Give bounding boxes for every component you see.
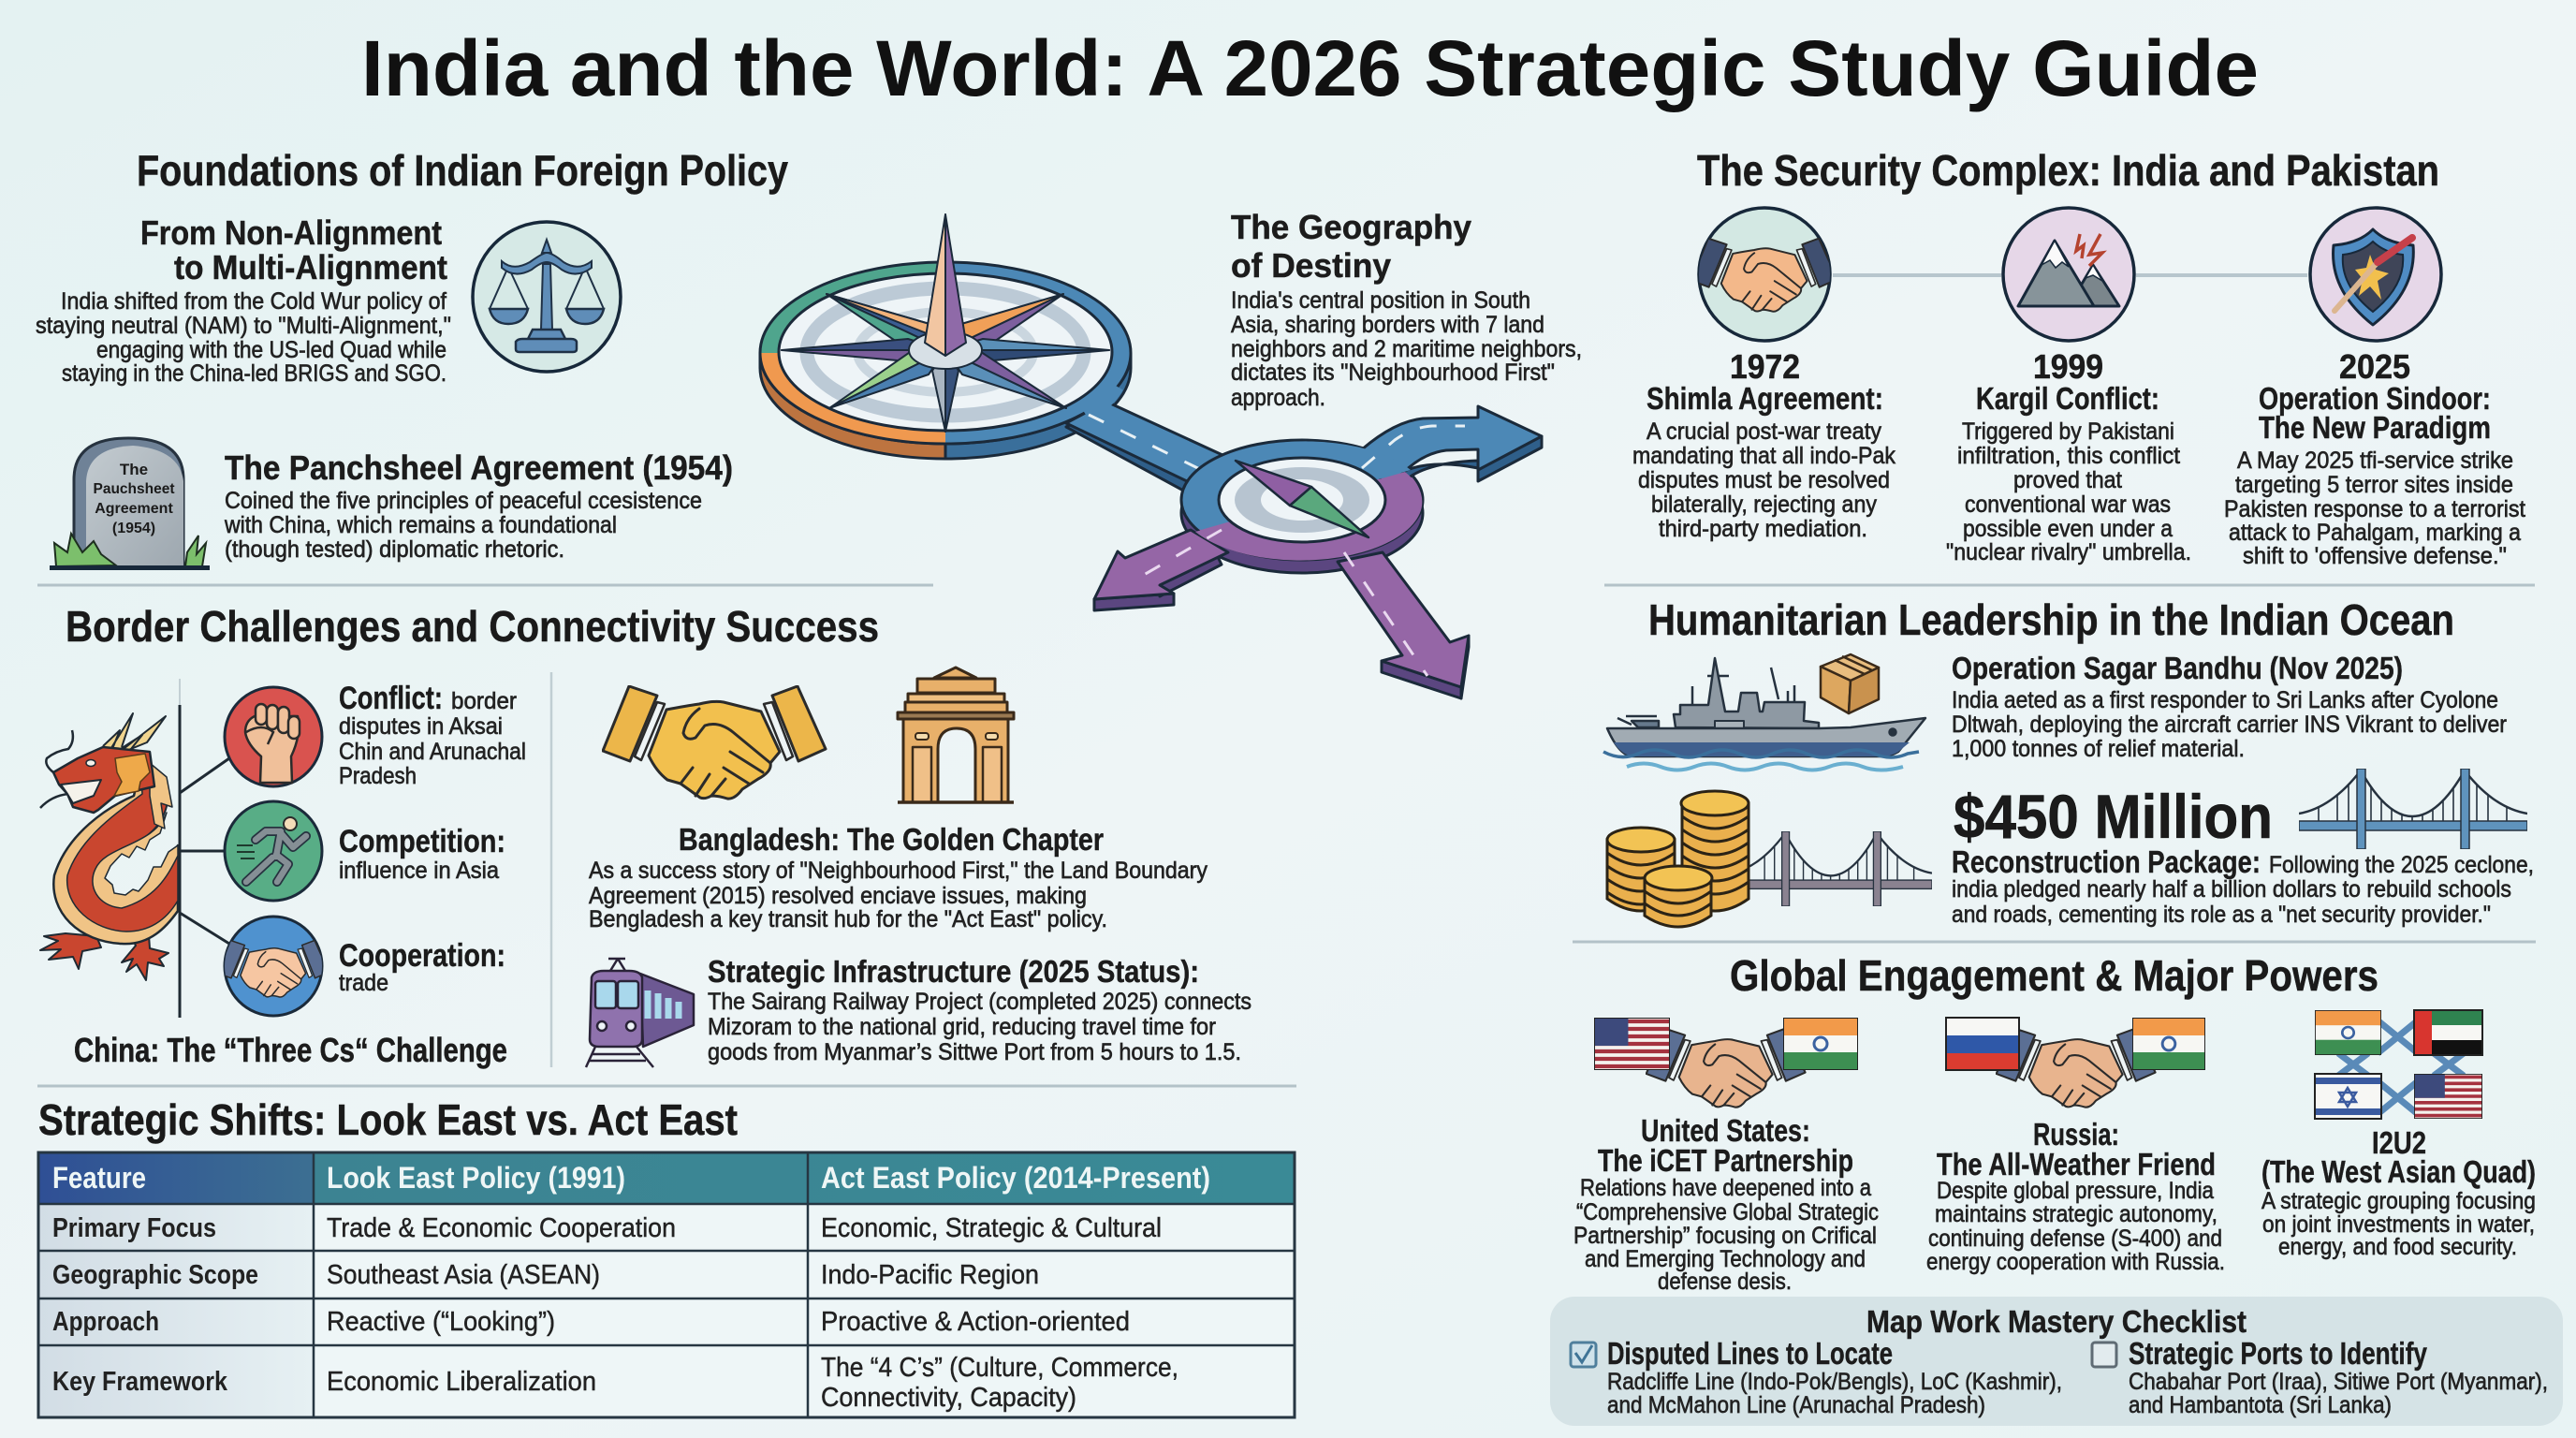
table: look east vs act east: Look East Policy (1991) [327,1161,625,1195]
text: I2U2: on joint investments in water, [2262,1211,2535,1238]
text: competition: influence in Asia [339,858,499,884]
text: cooperation: trade [339,970,388,996]
table: look east vs act east: Approach [52,1307,159,1337]
stat: $450 million: $450 Million [1954,782,2273,851]
panel: map work checklist [1550,1297,2563,1426]
table: look east vs act east: Connectivity, Capacity) [821,1383,1076,1413]
subheading: strategic infrastructure: Strategic Infrastructure (2025 Status): [708,954,1199,989]
icon: train [586,959,694,1067]
text: conflict: border [451,688,517,714]
subheading: non-alignment to multi-alignment: to Multi-Alignment [174,248,447,286]
icon: Shimla handshake [1691,208,1837,341]
timeline: 1999 Kargil: infiltration, this conflict [1957,443,2180,469]
text: infrastructure description: Mizoram to the national grid, reducing travel time for [708,1014,1216,1040]
icon: grey bridge [1731,831,1932,906]
text: competition: Competition: [339,824,505,859]
icon: scales of justice [473,222,621,372]
panel: global engagement [1573,951,2536,1295]
text: reconstruction package [1952,844,2534,928]
text: United States: and Emerging Technology and [1585,1246,1866,1272]
timeline: 2025 Sindoor: Pakisten response to a terrorist [2224,496,2525,522]
text: reconstruction package: Reconstruction Package: [1952,844,2261,879]
text: Russia: continuing defense (S-400) and [1928,1225,2222,1252]
text: geography description [1231,287,1582,411]
table: look east vs act east: Proactive & Action-oriented [821,1307,1130,1337]
illustration: compass and roads (geography of destiny) [760,214,1542,698]
icon: dragon [40,713,178,980]
text: United States: The iCET Partnership [1598,1143,1853,1178]
icon: blue bridge [2299,769,2527,849]
text: multi-alignment description: engaging with the US-led Quad while [96,337,446,363]
text: disputed lines: Disputed Lines to Locate [1607,1336,1893,1371]
text: geography description: neighbors and 2 maritime neighbors, [1231,336,1582,362]
text: reconstruction package: Following the 2025 ceclone, [2269,852,2534,878]
text: I2U2: energy, and food security. [2278,1234,2517,1260]
text: conflict: Pradesh [339,763,417,789]
text: United States: United States: [1641,1113,1810,1148]
subheading: geography: of Destiny [1231,246,1391,285]
text: I2U2 [2261,1125,2536,1260]
text: Russia: The All-Weather Friend [1937,1147,2216,1181]
table: look east vs act east: Indo-Pacific Region [821,1260,1039,1290]
road: compass to hub [1066,386,1222,492]
icon: conflict fist [225,687,322,786]
timeline: 1972 Shimla [1632,347,1895,542]
icon: coin stacks [1607,791,1749,927]
text: geography description: approach. [1231,385,1325,411]
icon: golden handshake [603,686,826,799]
heading: humanitarian: Humanitarian Leadership in the Indian Ocean [1648,595,2454,644]
text: strategic ports: and Hambantota (Sri Lanka) [2129,1392,2392,1418]
timeline: 2025 Sindoor: attack to Pahalgam, marking a [2229,520,2521,546]
timeline: 1972 Shimla: third-party mediation. [1659,516,1867,542]
panel: geography of destiny [1231,208,1582,411]
icon: Sindoor shield [2310,208,2441,341]
timeline: 1972 Shimla: Shimla Agreement: [1647,381,1883,416]
text: Bangladesh description: As a success story of "Neighbourhood First," the Land Boundary [589,858,1208,884]
table: look east vs act east: The “4 C’s” (Culture, Commerce, [821,1353,1178,1383]
table: look east vs act east [38,1152,1295,1417]
icon: US India handshake [1594,1018,1858,1108]
timeline: 2025 Sindoor: shift to 'offensive defense." [2243,543,2507,569]
text: multi-alignment description [36,288,451,387]
text: cooperation: Cooperation: [339,938,505,974]
text: Russia: energy cooperation with Russia. [1926,1249,2225,1275]
road hub with arrows [1094,406,1542,698]
text: conflict: Chin and Arunachal [339,739,526,765]
icon: tombstone with grass [50,438,210,570]
subheading: Panchsheel: The Panchsheel Agreement (1954) [225,448,733,487]
panel: foundations of Indian foreign policy [36,146,788,570]
timeline: 1972 Shimla: 1972 [1730,347,1800,386]
text: Panchsheel description [224,488,702,563]
heading: border challenges: Border Challenges and Connectivity Success [66,602,879,651]
text: Russia: Russia: [2033,1117,2119,1152]
icon: tombstone with grass: Agreement [95,501,173,517]
text: geography description: India's central position in South [1231,287,1530,314]
text: infrastructure description: The Sairang Railway Project (completed 2025) connects [708,989,1251,1015]
icon: I2U2 flags [2315,1010,2482,1119]
timeline: 1999 Kargil [1946,347,2191,565]
compass disk [760,262,1131,459]
text: United States [1573,1113,1879,1295]
text: Sagar Bandhu description: Dltwah, deploying the aircraft carrier INS Vikrant to deliver [1952,712,2507,738]
text: Bangladesh description: Agreement (2015) resolved enciave issues, making [589,883,1087,909]
subheading: geography: The Geography [1231,208,1471,246]
table: look east vs act east: Trade & Economic Cooperation [327,1213,676,1243]
icon: empty box [2092,1343,2116,1367]
arrow: north-east [1362,406,1542,487]
timeline: 2025 Sindoor: 2025 [2339,347,2410,386]
table: look east vs act east: Economic, Strategic & Cultural [821,1213,1162,1243]
text: I2U2: A strategic grouping focusing [2261,1188,2536,1214]
icon: Kargil mountains [2003,208,2134,341]
text: infrastructure description: goods from Myanmar’s Sittwe Port from 5 hours to 1.5. [708,1039,1241,1065]
table: look east vs act east: Primary Focus [52,1213,216,1243]
text: infrastructure description [708,989,1251,1065]
timeline: 2025 Sindoor: The New Paradigm [2259,410,2491,445]
heading: strategic shifts: Strategic Shifts: Look East vs. Act East [38,1095,738,1144]
text: geography description: Asia, sharing borders with 7 land [1231,312,1544,338]
subheading: Sagar Bandhu: Operation Sagar Bandhu (Nov 2025) [1952,651,2403,685]
text: disputed lines: and McMahon Line (Arunachal Pradesh) [1607,1392,1985,1418]
timeline: 1999 Kargil: Kargil Conflict: [1976,381,2159,416]
icon: relief box [1821,654,1879,713]
text: geography description: dictates its "Neighbourhood First" [1231,360,1555,386]
table: look east vs act east: Feature [52,1161,146,1195]
icon: Russia India handshake [1946,1018,2205,1108]
timeline: 1999 Kargil: proved that [2013,467,2122,493]
icon: tombstone with grass: Pauchsheet [93,481,175,497]
text: United States: Relations have deepened into a [1580,1175,1871,1201]
text: conflict: Conflict: [339,681,443,716]
heading: foundations: Foundations of Indian Foreign Policy [137,146,788,195]
text: Russia: Despite global pressure, India [1937,1178,2214,1204]
icon: checked box [1571,1343,1596,1367]
text: Sagar Bandhu description: 1,000 tonnes of relief material. [1952,736,2245,762]
panel: security complex [1632,146,2525,569]
text: Sagar Bandhu description [1952,687,2507,762]
text: disputed lines [1607,1336,2062,1418]
star rose [782,214,1109,432]
timeline: 2025 Sindoor [2224,347,2525,569]
text: competition [339,824,505,884]
text: Panchsheel description: (though tested) diplomatic rhetoric. [225,536,564,563]
timeline: 1972 Shimla: disputes must be resolved [1638,467,1890,493]
timeline: 2025 Sindoor: targeting 5 terror sites inside [2235,472,2513,498]
icon: tombstone with grass: (1954) [112,521,155,536]
heading: security complex: The Security Complex: India and Pakistan [1697,146,2439,195]
table: look east vs act east: Economic Liberalization [327,1367,596,1397]
text: conflict [339,681,526,789]
text: Panchsheel description: Coined the five principles of peaceful ccesistence [225,488,702,514]
connector lines [180,679,229,1018]
table: look east vs act east: Key Framework [52,1367,228,1397]
text: cooperation [339,938,505,996]
timeline: 2025 Sindoor: Operation Sindoor: [2259,381,2491,416]
text: Panchsheel description: with China, which remains a foundational [224,512,617,538]
text: Russia [1926,1117,2225,1275]
timeline: 1999 Kargil: possible even under a [1963,516,2173,542]
icon: competition runner [225,801,322,901]
table: look east vs act east: Reactive (“Looking”) [327,1307,555,1337]
timeline: 1999 Kargil: Triggered by Pakistani [1962,418,2174,445]
arrow: south-west [1094,530,1228,610]
table: look east vs act east: Southeast Asia (ASEAN) [327,1260,600,1290]
subheading: non-alignment to multi-alignment [140,213,447,286]
text: disputed lines: Radcliffe Line (Indo-Pok/Bengls), LoC (Kashmir), [1607,1369,2062,1395]
subheading: Bangladesh: Bangladesh: The Golden Chapter [679,822,1104,857]
text: Russia: maintains strategic autonomy, [1935,1201,2217,1227]
text: United States: defense desis. [1658,1269,1792,1295]
arrow: south-east [1338,552,1469,698]
text: I2U2: I2U2 [2372,1125,2426,1160]
heading: checklist: Map Work Mastery Checklist [1866,1304,2247,1339]
timeline: 1972 Shimla: A crucial post-war treaty [1647,418,1881,445]
text: Bangladesh description: Bengladesh a key transit hub for the "Act East" policy. [589,906,1107,932]
text: United States: “Comprehensive Global Strategic [1576,1199,1879,1225]
timeline: 2025 Sindoor: A May 2025 tfi-service strike [2237,448,2513,474]
title: India and the World: A 2026 Strategic Study Guide [361,24,2259,112]
timeline: 1999 Kargil: 1999 [2033,347,2103,386]
text: Sagar Bandhu description: India aeted as a first responder to Sri Lanks after Cyolone [1952,687,2498,713]
icon: naval ship [1603,658,1925,770]
text: multi-alignment description: staying in the China-led BRIGS and SGO. [62,360,446,387]
timeline: 1999 Kargil: conventional war was [1965,492,2171,518]
text: reconstruction package: india pledged nearly half a billion dollars to rebuild schools [1952,876,2511,902]
panel: border challenges and connectivity [40,602,1251,1069]
text: reconstruction package: and roads, cementing its role as a "net security provider." [1952,902,2491,928]
text: United States: Partnership” focusing on Crifical [1573,1223,1877,1249]
icon: tombstone with grass: The [120,461,148,478]
timeline: 1972 Shimla: bilaterally, rejecting any [1651,492,1877,518]
panel: strategic shifts table [38,1095,1295,1417]
timeline: 1999 Kargil: "nuclear rivalry" umbrella. [1946,539,2191,565]
text: Bangladesh description [589,858,1208,932]
text: conflict: disputes in Aksai [339,713,503,740]
icon: cooperation handshake [217,917,329,1016]
table: look east vs act east: Act East Policy (2014-Present) [821,1161,1210,1195]
text: strategic ports [2129,1336,2548,1418]
caption: three Cs: China: The “Three Cs“ Challenge [74,1031,507,1069]
subheading: non-alignment to multi-alignment: From Non-Alignment [140,213,442,252]
text: strategic ports: Strategic Ports to Identify [2129,1336,2428,1371]
text: multi-alignment description: India shifted from the Cold Wur policy of [61,288,446,315]
panel: humanitarian leadership [1603,595,2534,928]
subheading: geography [1231,208,1471,285]
table: look east vs act east: Geographic Scope [52,1260,258,1290]
text: multi-alignment description: staying neutral (NAM) to "Multi-Alignment," [36,313,451,339]
timeline: 1972 Shimla: mandating that all indo-Pak [1632,443,1895,469]
heading: global engagement: Global Engagement & Major Powers [1730,951,2378,1000]
icon: India Gate [898,668,1014,802]
